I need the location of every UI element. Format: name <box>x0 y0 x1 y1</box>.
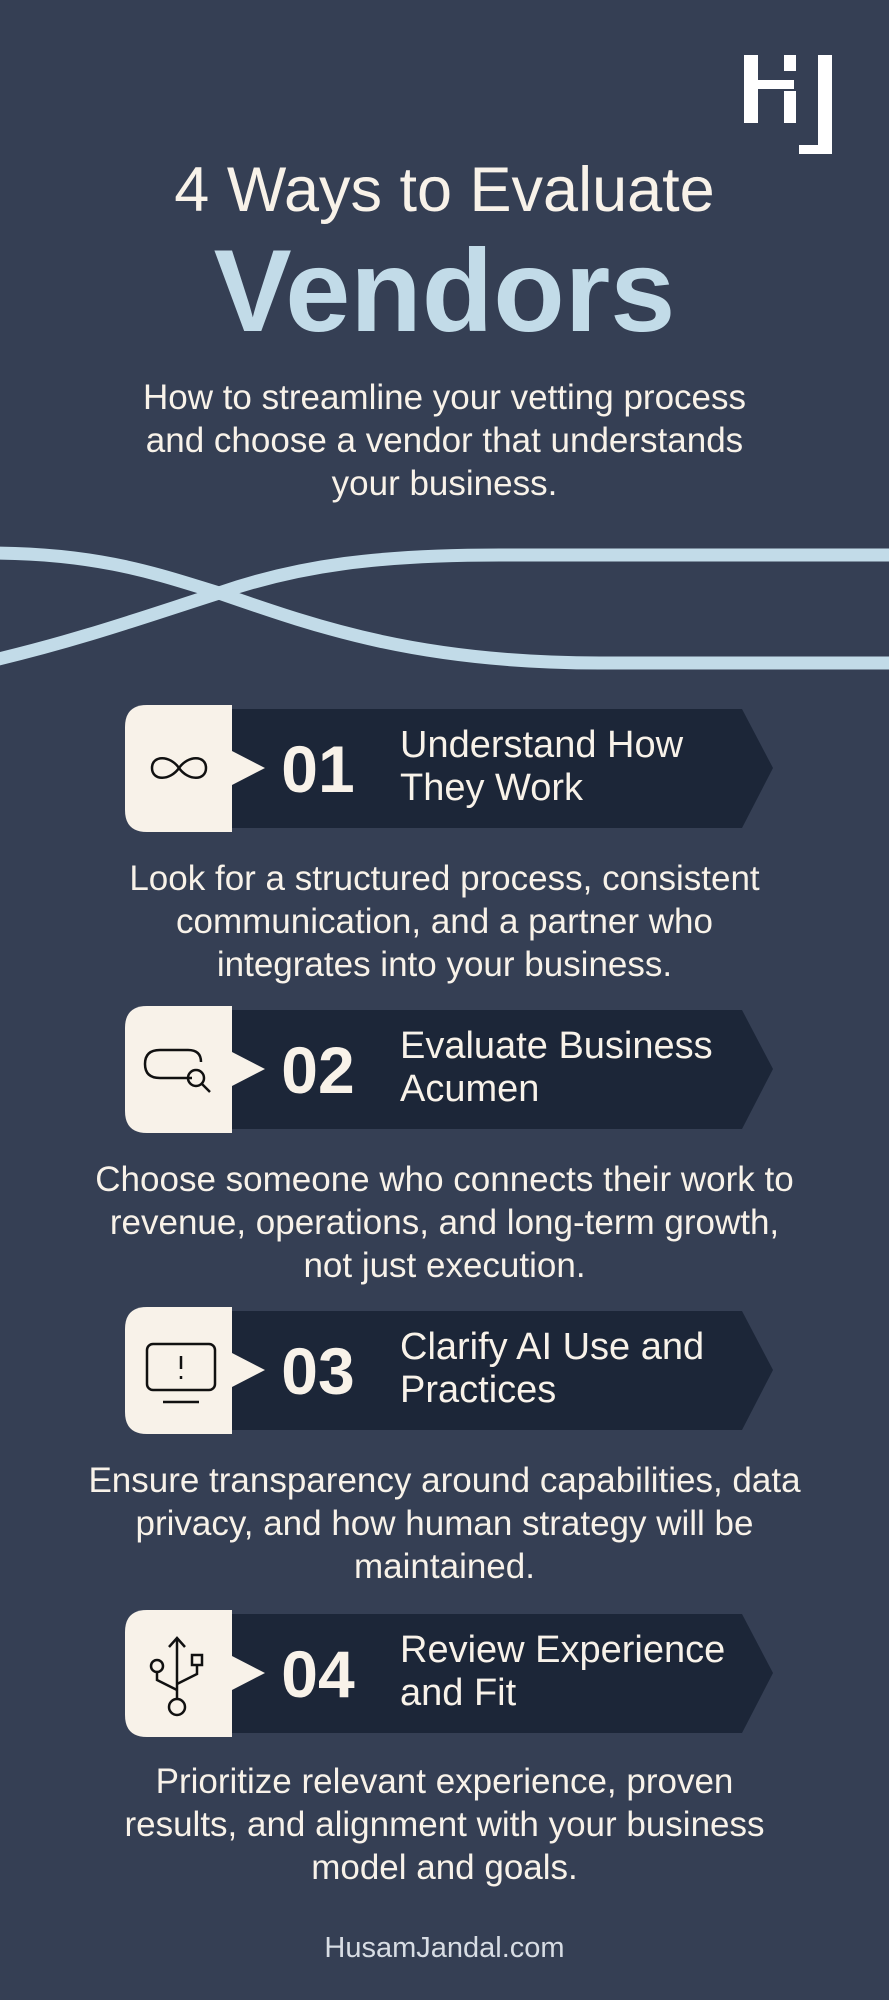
card 4: and Fit <box>400 1672 516 1714</box>
description 4: results, and alignment with your business <box>124 1805 765 1844</box>
card 4 <box>125 1610 773 1737</box>
card 1: Understand How <box>400 724 683 766</box>
card 3: 03 <box>281 1334 355 1408</box>
icon: monitor alert <box>147 1344 215 1402</box>
description 4: model and goals. <box>311 1848 578 1887</box>
description 1 <box>129 859 760 984</box>
card 1: They Work <box>400 767 583 809</box>
subtitle <box>143 378 746 503</box>
description 4: Prioritize relevant experience, proven <box>156 1762 733 1801</box>
card 2: 02 <box>281 1033 355 1107</box>
icon: usb <box>151 1638 202 1715</box>
decorative waves <box>0 546 889 670</box>
card 4: 04 <box>281 1637 355 1711</box>
description 2: not just execution. <box>303 1246 586 1285</box>
card 2 <box>125 1006 773 1133</box>
subtitle: How to streamline your vetting process <box>143 378 746 417</box>
card 1: 01 <box>281 732 355 806</box>
card 2: Evaluate Business <box>400 1025 713 1067</box>
logo: HJ <box>744 55 832 154</box>
card 2: Acumen <box>400 1068 539 1110</box>
description 3 <box>88 1461 801 1586</box>
card 3: Clarify AI Use and <box>400 1326 704 1368</box>
description 1: integrates into your business. <box>217 945 672 984</box>
footer: HusamJandal.com <box>324 1932 565 1964</box>
subtitle: and choose a vendor that understands <box>146 421 743 460</box>
description 4 <box>124 1762 765 1887</box>
description 3: Ensure transparency around capabilities, data <box>88 1461 801 1500</box>
subtitle: your business. <box>332 464 557 503</box>
title: 4 Ways to Evaluate <box>174 155 715 225</box>
description 2: Choose someone who connects their work to <box>95 1160 794 1199</box>
description 1: communication, and a partner who <box>176 902 713 941</box>
title: Vendors: Vendors <box>214 225 675 356</box>
card 3 <box>125 1307 773 1434</box>
description 3: privacy, and how human strategy will be <box>136 1504 754 1543</box>
description 1: Look for a structured process, consistent <box>129 859 760 898</box>
description 2 <box>95 1160 794 1285</box>
icon: infinity <box>152 758 206 778</box>
description 2: revenue, operations, and long-term growth, <box>110 1203 779 1242</box>
icon: search bubble <box>145 1050 210 1092</box>
description 3: maintained. <box>354 1547 535 1586</box>
card 3: Practices <box>400 1369 556 1411</box>
card 1 <box>125 705 773 832</box>
card 4: Review Experience <box>400 1629 725 1671</box>
